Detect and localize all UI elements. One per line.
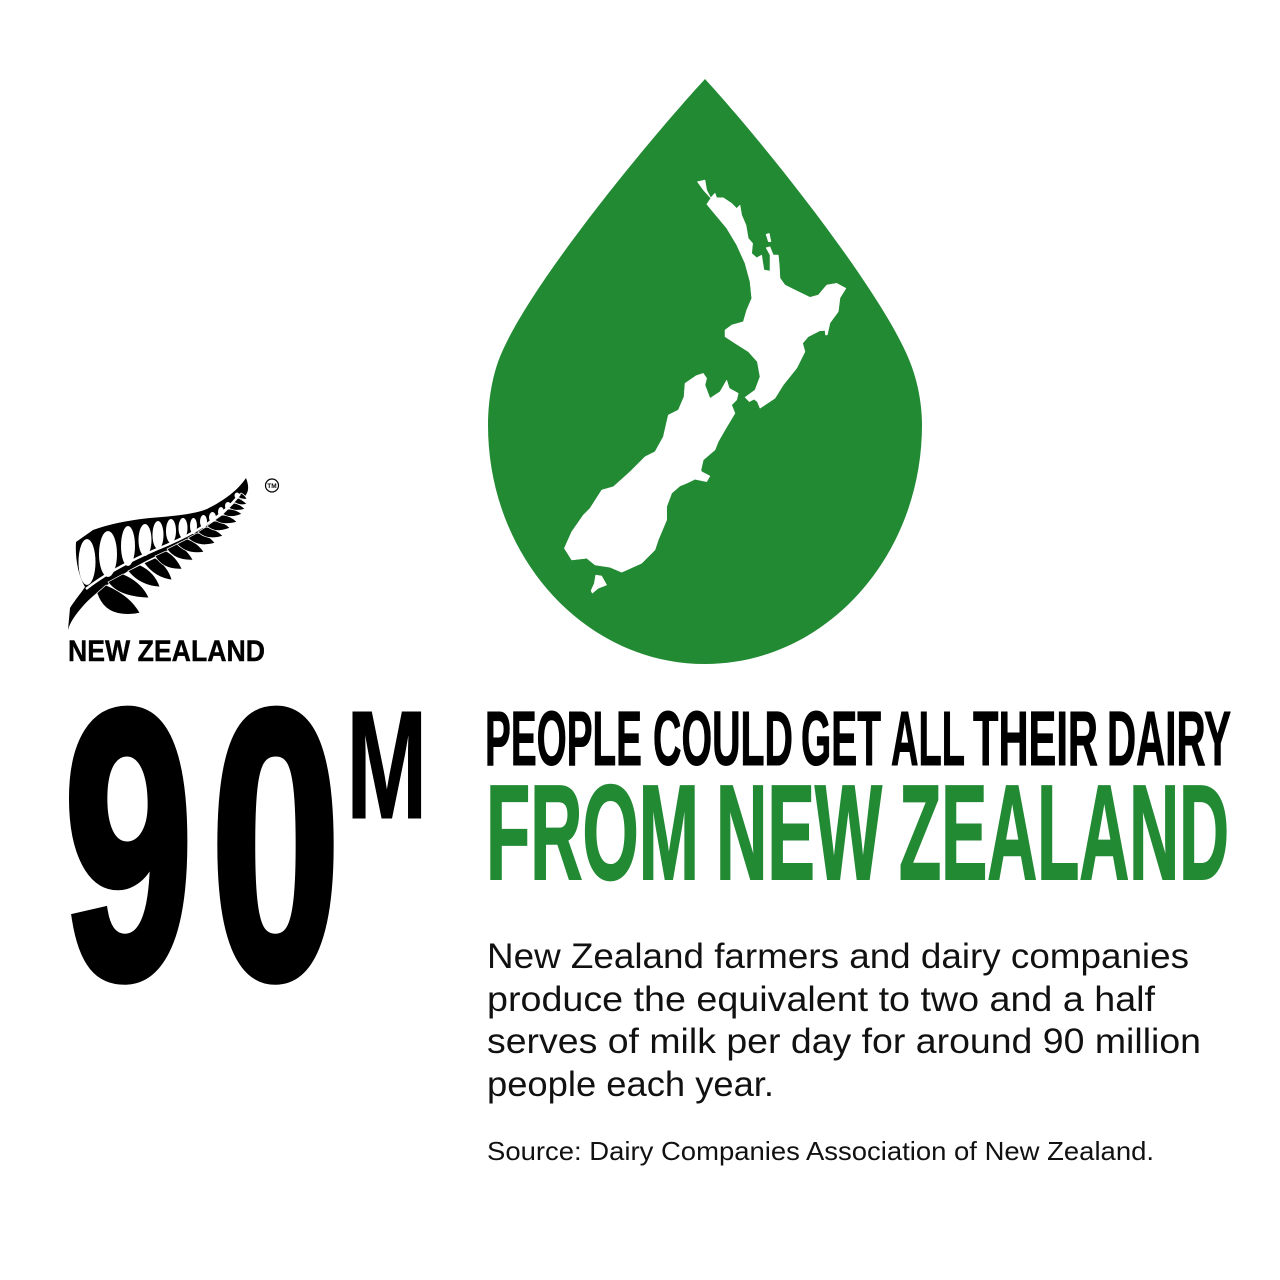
- logo: silver fern with New Zealand wordmark: [68, 478, 278, 668]
- body text: New Zealand farmers and dairy companies: [487, 937, 1189, 976]
- wordmark: NEW ZEALAND: [68, 635, 265, 668]
- headline line 1: ALL: [891, 696, 965, 782]
- body text: [487, 937, 1201, 1104]
- headline line 1: COULD: [653, 696, 793, 782]
- source note: Source: Dairy Companies Association of New Zealand.: [487, 1136, 1154, 1166]
- map: New Zealand islands: [564, 180, 846, 593]
- icon: green milk drop with New Zealand map: [488, 79, 922, 664]
- big number: 90M: [64, 632, 427, 1057]
- body text: people each year.: [487, 1065, 774, 1104]
- drop shape: [488, 79, 922, 664]
- headline line 1: GET: [801, 696, 881, 782]
- headline line 2: FROM: [486, 757, 699, 908]
- icon: trademark: [266, 479, 278, 492]
- headline: [485, 696, 1231, 908]
- body text: serves of milk per day for around 90 million: [487, 1022, 1201, 1061]
- icon: trademark: TM: [267, 483, 277, 490]
- body text: produce the equivalent to two and a half: [487, 980, 1155, 1019]
- number 90: 90: [64, 632, 358, 1057]
- superscript M: M: [346, 679, 427, 851]
- headline line 2: NEW: [716, 757, 882, 908]
- headline line 2: [486, 757, 1229, 908]
- headline line 1: PEOPLE: [485, 696, 642, 782]
- headline line 1: THEIR: [973, 696, 1098, 782]
- icon: silver fern: [68, 478, 248, 630]
- headline line 1: [485, 696, 1231, 782]
